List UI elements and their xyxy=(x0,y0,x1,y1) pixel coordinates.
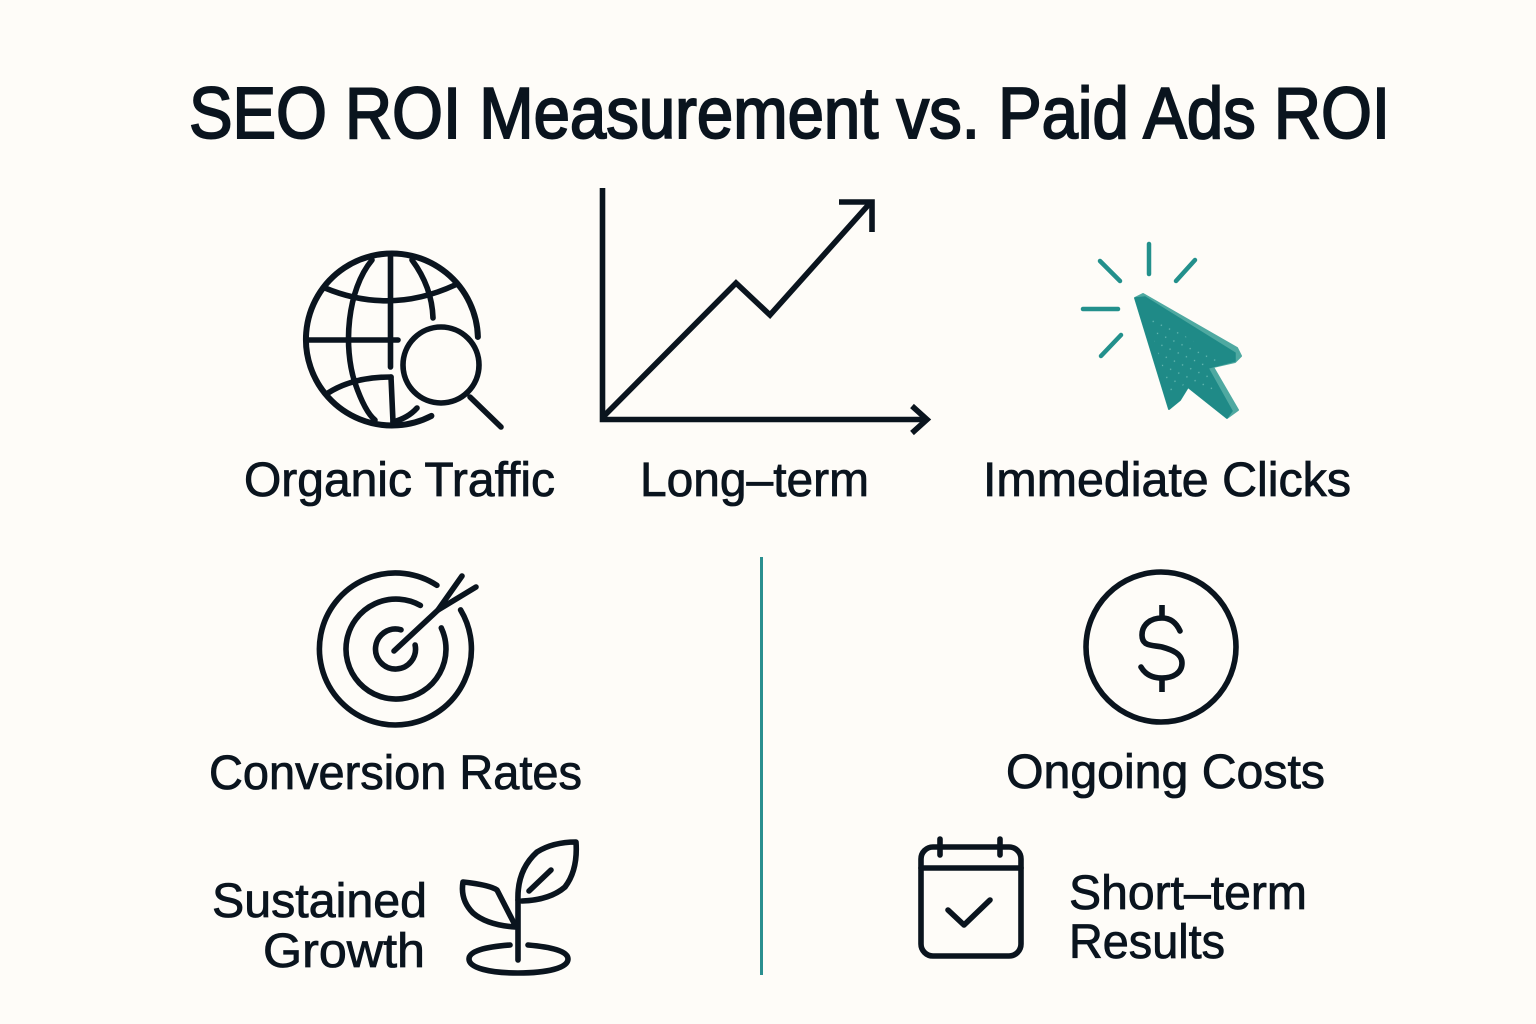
panel: sustained growth xyxy=(212,842,576,978)
label: sustained growth: Growth xyxy=(263,925,425,978)
panel: immediate clicks xyxy=(983,244,1351,507)
icon: target with arrow xyxy=(319,573,476,725)
icon: globe with magnifying glass xyxy=(306,253,501,427)
panel: long-term growth chart xyxy=(602,188,927,507)
panel: organic traffic xyxy=(244,253,555,507)
panel: short-term results xyxy=(921,839,1307,969)
label: ongoing costs: Ongoing Costs xyxy=(1006,746,1325,799)
label: sustained growth: Sustained xyxy=(212,875,427,928)
label: long-term: Long–term xyxy=(640,454,869,507)
panel: conversion rates xyxy=(209,573,582,800)
line chart with arrows xyxy=(602,188,927,433)
label: organic traffic: Organic Traffic xyxy=(244,454,555,507)
label: immediate clicks: Immediate Clicks xyxy=(983,454,1351,507)
panel: ongoing costs xyxy=(1006,572,1325,799)
label: conversion rates: Conversion Rates xyxy=(209,747,582,800)
icon: dollar coin xyxy=(1086,572,1236,722)
divider xyxy=(760,557,763,975)
label: short-term results: Short–term xyxy=(1069,867,1307,920)
title: SEO ROI Measurement vs. Paid Ads ROI xyxy=(189,74,1390,154)
label: short-term results: Results xyxy=(1069,916,1225,969)
label: sustained growth xyxy=(212,875,427,978)
label: short-term results xyxy=(1069,867,1307,969)
icon: calendar with check xyxy=(921,839,1021,956)
icon: sprout xyxy=(462,842,576,973)
icon: teal cursor with click rays xyxy=(1083,244,1241,418)
